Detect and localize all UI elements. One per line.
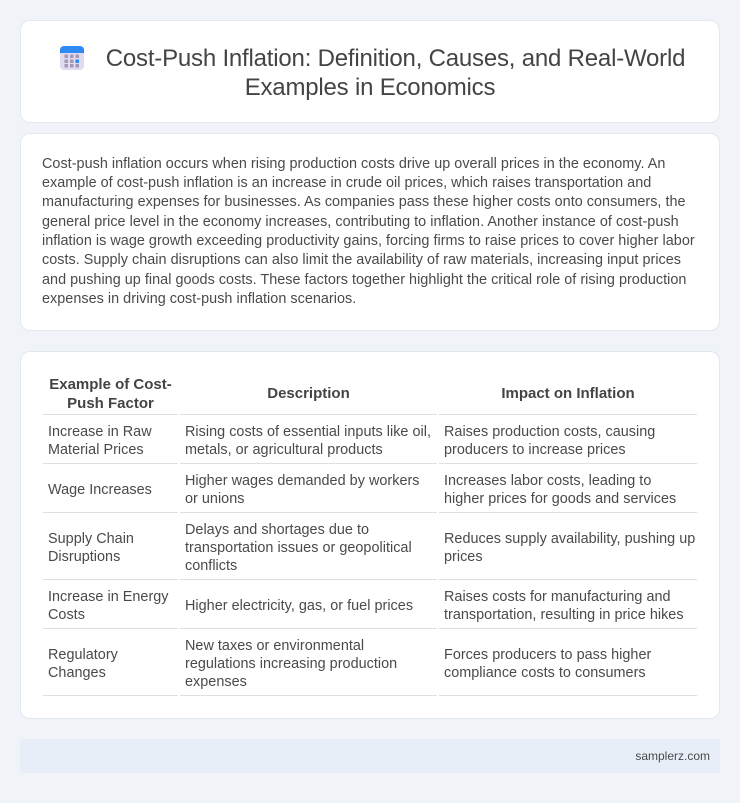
row: energy	[48, 589, 684, 623]
panel: table card	[20, 351, 720, 719]
row: supply chain: prices	[444, 549, 483, 565]
row: supply chain	[48, 522, 695, 574]
row: energy: Costs	[48, 607, 85, 623]
row: regulation: New taxes or environmental	[185, 638, 364, 654]
text block: intro	[42, 156, 695, 307]
row: regulation: compliance costs to consumers	[444, 665, 646, 681]
row: regulation: expenses	[185, 674, 247, 690]
row: regulation: Forces producers to pass higher	[444, 647, 651, 663]
table header: Example of Cost-	[49, 376, 172, 393]
panel: intro paragraph	[20, 133, 720, 331]
row: raw materials: Material Prices	[48, 442, 144, 458]
row: regulation	[48, 638, 652, 690]
row: wages: or unions	[185, 491, 244, 507]
title	[106, 45, 685, 101]
row: raw materials: Increase in Raw	[48, 424, 152, 440]
table header: Push Factor	[67, 395, 154, 412]
row: raw materials	[48, 424, 655, 458]
text block: intro: general price level in the economy increases, contributing to inflation. Another instance of cost-push	[42, 214, 679, 230]
text block: intro: Cost-push inflation occurs when rising production costs drive up overall prices in the economy. An	[42, 156, 665, 172]
row: wages: higher prices for goods and services	[444, 491, 676, 507]
text block: intro: and pushing up final goods costs. These factors together highlight the critical role of rising production	[42, 272, 686, 288]
row: energy: Increase in Energy	[48, 589, 169, 605]
text block: intro: example of cost-push inflation is an increase in crude oil prices, which raises transportation and	[42, 175, 651, 191]
row: raw materials: Raises production costs, causing	[444, 424, 655, 440]
row: wages: Wage Increases	[48, 482, 152, 498]
title: Examples in Economics	[245, 74, 495, 101]
text block: intro: expenses in driving cost-push inflation scenarios.	[42, 291, 356, 307]
icon: calendar	[60, 46, 84, 70]
table header: Impact on Inflation	[501, 385, 635, 402]
row: energy: transportation, resulting in price hikes	[444, 607, 684, 623]
row: supply chain: conflicts	[185, 558, 237, 574]
row: regulation: regulations increasing production	[185, 656, 397, 672]
panel: title card	[20, 20, 720, 123]
row: supply chain: Reduces supply availability, pushing up	[444, 531, 695, 547]
footer text: samplerz.com	[635, 749, 710, 763]
table header	[49, 376, 635, 412]
row: supply chain: Supply Chain	[48, 531, 134, 547]
title: Cost-Push Inflation: Definition, Causes, and Real-World	[106, 45, 685, 72]
row: regulation: Regulatory	[48, 647, 118, 663]
row: raw materials: Rising costs of essential inputs like oil,	[185, 424, 431, 440]
text block: intro: manufacturing expenses for businesses. As companies pass these higher costs onto consumers, the	[42, 194, 686, 210]
row: supply chain: transportation issues or geopolitical	[185, 540, 412, 556]
row: wages	[48, 473, 676, 507]
row: wages: Higher wages demanded by workers	[185, 473, 420, 489]
row: regulation: Changes	[48, 665, 106, 681]
rules	[43, 414, 697, 696]
text block: intro: costs. Supply chain disruptions can also limit the availability of raw materials, increasing input prices	[42, 252, 681, 268]
row: supply chain: Disruptions	[48, 549, 120, 565]
table header: Description	[267, 385, 350, 402]
footer bar	[20, 739, 720, 773]
table	[43, 376, 697, 696]
row: supply chain: Delays and shortages due to	[185, 522, 369, 538]
text block: intro: inflation is wage growth exceeding productivity gains, forcing firms to raise prices to cover higher labor	[42, 233, 695, 249]
row: energy: Raises costs for manufacturing and	[444, 589, 671, 605]
row: raw materials: producers to increase prices	[444, 442, 626, 458]
row: wages: Increases labor costs, leading to	[444, 473, 651, 489]
row: raw materials: metals, or agricultural products	[185, 442, 383, 458]
row: energy: Higher electricity, gas, or fuel prices	[185, 598, 413, 614]
